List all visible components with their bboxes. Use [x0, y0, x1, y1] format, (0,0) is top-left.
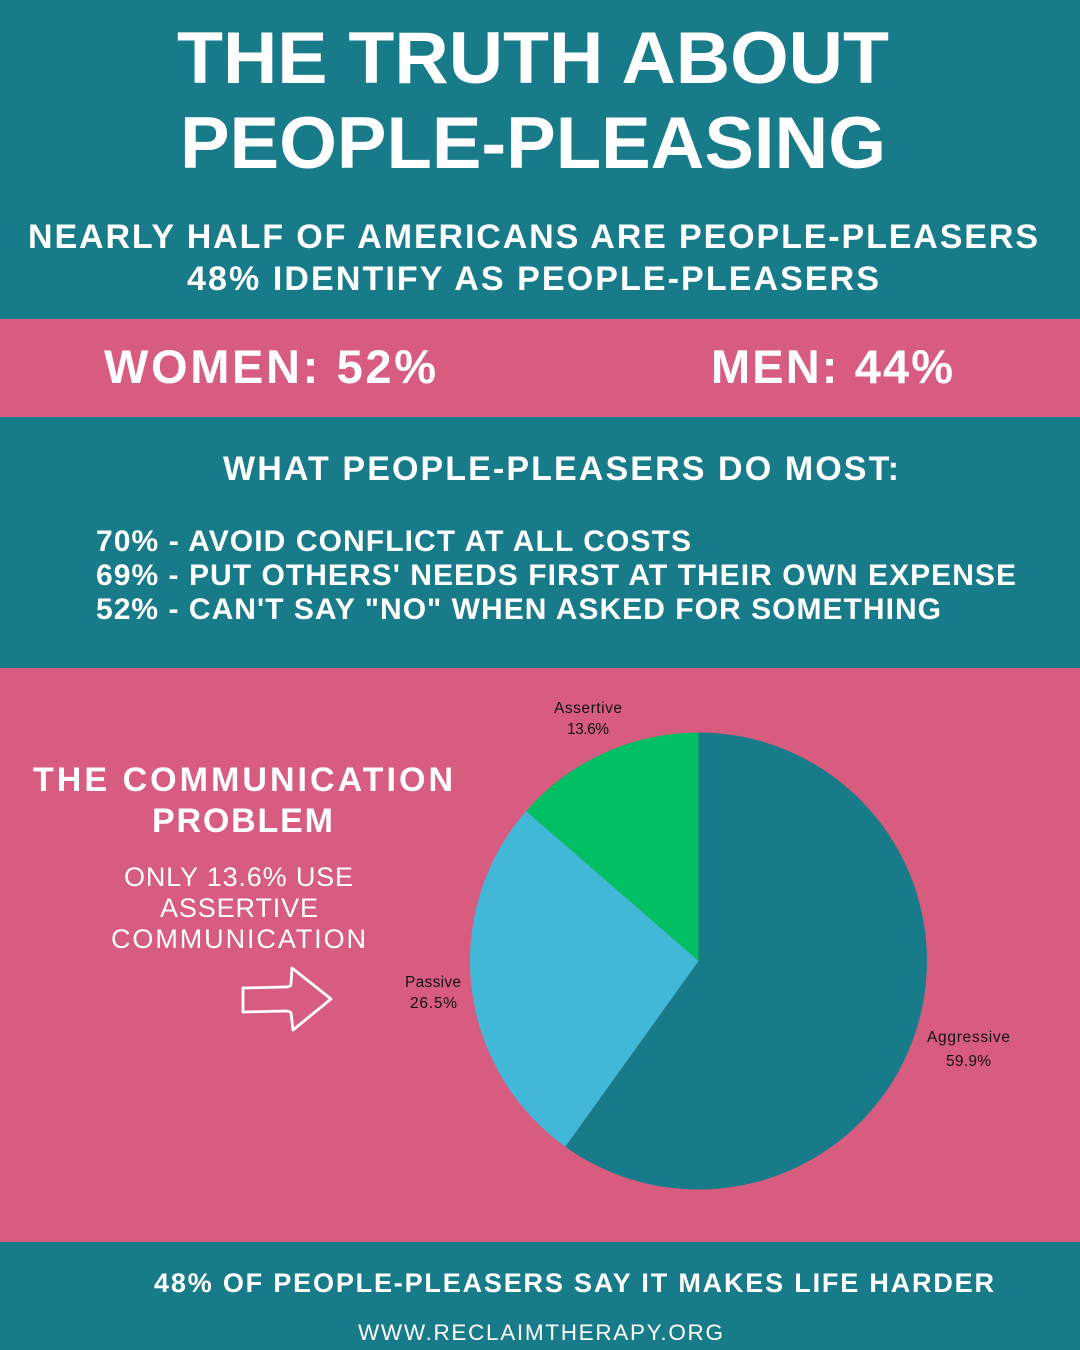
subtitle statistic [28, 218, 1038, 298]
communication description: ASSERTIVE [160, 893, 318, 923]
title: PEOPLE-PLEASING [180, 103, 886, 184]
men statistic: MEN: 44% [711, 340, 953, 393]
panel: communication problem [0, 668, 1080, 1242]
label: aggressive: Aggressive [927, 1029, 1010, 1046]
closing statistic: 48% OF PEOPLE-PLEASERS SAY IT MAKES LIFE HARDER [154, 1268, 994, 1298]
panel: behaviours [0, 417, 1080, 668]
behaviours list: 70% - AVOID CONFLICT AT ALL COSTS [96, 525, 691, 558]
label: passive [405, 974, 461, 1012]
label: assertive [554, 700, 622, 738]
behaviours list: 52% - CAN'T SAY "NO" WHEN ASKED FOR SOMETHING [96, 593, 941, 626]
communication description [111, 862, 366, 954]
panel: header [0, 0, 1080, 319]
slice: assertive [526, 732, 698, 961]
communication description: ONLY 13.6% USE [124, 862, 353, 892]
behaviours list [96, 525, 1016, 626]
label: assertive: 13.6% [567, 721, 609, 738]
panel: gender split [0, 319, 1080, 417]
label: aggressive [927, 1029, 1010, 1070]
website url: WWW.RECLAIMTHERAPY.ORG [358, 1320, 723, 1345]
icon: arrow pointing to chart [243, 968, 331, 1030]
label: aggressive: 59.9% [946, 1053, 991, 1070]
slice: passive [470, 811, 698, 1147]
title [177, 18, 889, 184]
label: assertive: Assertive [554, 700, 622, 717]
title: THE TRUTH ABOUT [177, 18, 889, 99]
subtitle statistic: NEARLY HALF OF AMERICANS ARE PEOPLE-PLEASERS [28, 218, 1038, 256]
communication heading [33, 761, 453, 840]
communication heading: THE COMMUNICATION [33, 761, 453, 799]
behaviours heading: WHAT PEOPLE-PLEASERS DO MOST: [223, 450, 899, 488]
pie chart [405, 700, 1010, 1190]
behaviours list: 69% - PUT OTHERS' NEEDS FIRST AT THEIR OWN EXPENSE [96, 559, 1016, 592]
subtitle statistic: 48% IDENTIFY AS PEOPLE-PLEASERS [187, 260, 879, 298]
panel: footer [0, 1242, 1080, 1350]
communication description: COMMUNICATION [111, 924, 366, 954]
slice: aggressive [565, 732, 927, 1190]
label: passive: 26.5% [410, 995, 457, 1012]
communication heading: PROBLEM [152, 802, 333, 840]
women statistic: WOMEN: 52% [104, 340, 436, 393]
label: passive: Passive [405, 974, 461, 991]
